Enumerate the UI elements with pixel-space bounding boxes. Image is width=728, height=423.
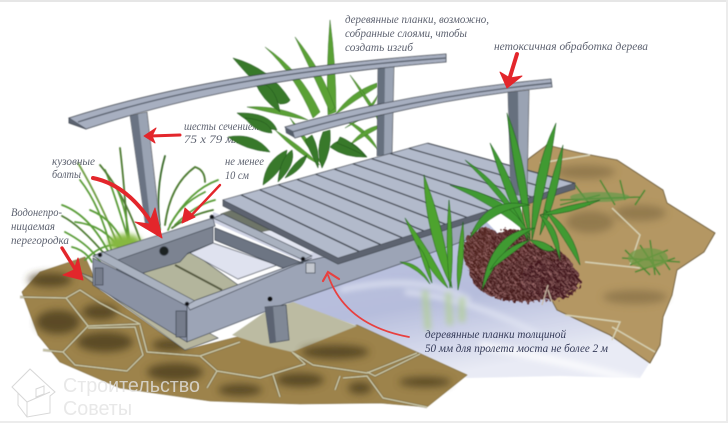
callout: bolts: [52, 154, 96, 181]
callout: top planks: создать изгиб: [345, 40, 414, 54]
arrow: min distance: [182, 185, 220, 223]
plant: grass behind frame: [62, 148, 218, 262]
watermark: text: [63, 375, 200, 420]
plant: spiky clump by right post: [450, 113, 600, 290]
callout: posts: шесты сечением: [184, 119, 259, 133]
joints: [176, 311, 186, 337]
arrow: deck planks: [323, 272, 409, 337]
callout: top planks: [345, 12, 489, 54]
watermark: text: Строительство: [63, 375, 200, 397]
plant: iris clump left of shrub: [400, 175, 464, 290]
callout: waterproof partition: ницаемая: [11, 219, 55, 233]
left handrail post: [130, 112, 160, 228]
back wall: [112, 226, 213, 290]
moss: [560, 180, 680, 275]
watermark: house icon: [12, 369, 55, 417]
callout: top planks: деревянные планки, возможно,: [345, 12, 489, 26]
left beam top: [93, 252, 195, 306]
bridge deck planks: [223, 143, 575, 264]
paving stones: front left: [20, 257, 467, 407]
concrete pad: [232, 302, 357, 352]
right curved handrail: [285, 79, 552, 138]
callout: deck planks: деревянные планки толщиной: [425, 327, 566, 341]
bridge frame: [78, 205, 480, 350]
callout: waterproof partition: Водонепро-: [11, 205, 62, 219]
watermark: text: Советы: [63, 398, 132, 420]
callout: deck planks: [425, 327, 608, 355]
arrow: bolts: [93, 178, 162, 238]
paving stones: right bank: [520, 145, 715, 363]
long side beam: [187, 212, 480, 342]
callout: bolts: кузовные: [52, 154, 96, 168]
plant: tall leaves behind the bridge: [228, 20, 385, 185]
cross beam: [215, 228, 303, 268]
middle handrail post: [377, 65, 394, 156]
concrete footing slab: [78, 272, 218, 350]
arrow: partition: [62, 248, 83, 280]
callout: waterproof partition: перегородка: [11, 233, 69, 247]
callout: posts: [184, 119, 259, 146]
right handrail post: [508, 90, 529, 195]
callout: posts: 75 x 79 мм: [184, 132, 242, 146]
callout: waterproof partition: [11, 205, 69, 247]
callout: non-toxic treatment: нетоксичная обработка дерева: [494, 39, 648, 53]
arrow: posts: [144, 128, 180, 143]
support post stub: [265, 305, 289, 343]
left curved handrail: [69, 54, 446, 129]
callout: deck planks: 50 мм для пролета моста не более 2 м: [425, 341, 608, 355]
callout: bolts: болты: [52, 167, 81, 181]
callout: top planks: собранные слоями, чтобы: [345, 26, 467, 40]
back beam top: [95, 218, 215, 262]
callout: min distance: не менее: [225, 154, 265, 168]
callout: min distance: [225, 154, 265, 182]
under-deck void: [213, 212, 345, 262]
bolt: [160, 246, 168, 256]
callout: min distance: 10 см: [225, 168, 249, 182]
arrow: non-toxic treatment: [500, 54, 522, 88]
pond water: [287, 215, 650, 382]
left wall: [93, 258, 187, 342]
mortar joints: [20, 290, 427, 407]
right beam top: [187, 258, 312, 310]
inner floor: [143, 252, 245, 305]
stone shading: [28, 273, 451, 396]
red mulch shrub: [463, 228, 580, 305]
